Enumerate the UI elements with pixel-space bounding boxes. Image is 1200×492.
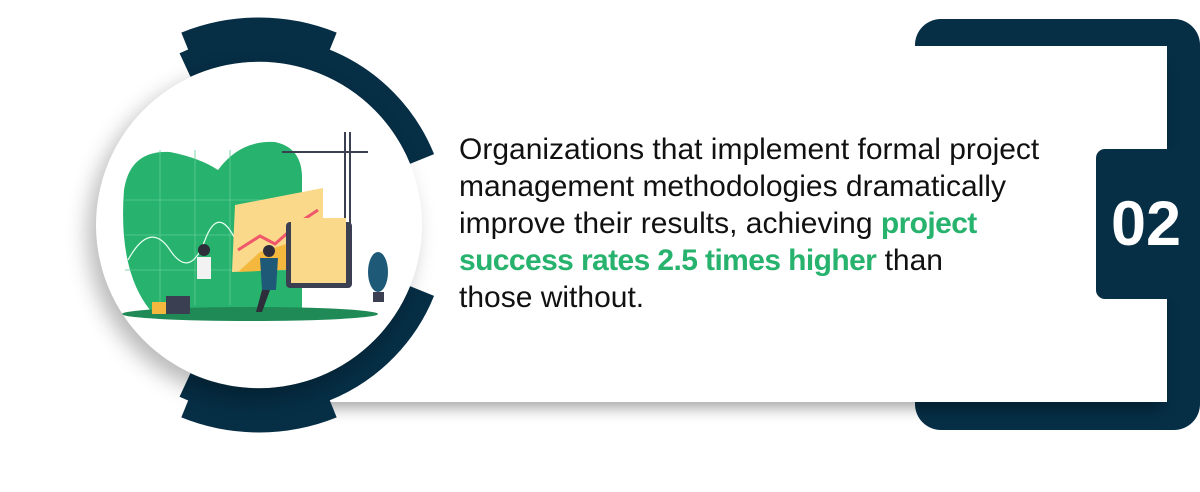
number label: 02 bbox=[1111, 189, 1181, 259]
number tab bbox=[1096, 149, 1200, 299]
body text: improve their results, achieving project bbox=[459, 207, 977, 240]
circle with illustration bbox=[96, 62, 422, 388]
arc top bbox=[185, 49, 422, 159]
crane bbox=[282, 132, 368, 270]
arc outer step bottom bbox=[186, 406, 332, 420]
body text: success rates 2.5 times higher than bbox=[459, 244, 943, 277]
chart board bbox=[232, 188, 323, 272]
arc bottom bbox=[185, 291, 422, 401]
body text bbox=[459, 133, 1039, 314]
ground bbox=[122, 307, 378, 321]
grid lines bbox=[125, 150, 300, 305]
frame: right navy bracket bbox=[915, 19, 1200, 430]
body text: management methodologies dramatically bbox=[459, 170, 1006, 203]
monitor bbox=[286, 222, 352, 288]
body text: those without. bbox=[459, 281, 644, 314]
wave lines bbox=[128, 222, 240, 263]
people bbox=[198, 244, 210, 256]
boxes bbox=[152, 302, 166, 314]
green blob bbox=[123, 142, 302, 310]
card: white text panel bbox=[300, 46, 1167, 402]
ring arcs bbox=[180, 18, 434, 432]
arc outer step top bbox=[186, 30, 332, 44]
body text: Organizations that implement formal project bbox=[459, 133, 1039, 166]
plant bbox=[368, 252, 388, 292]
